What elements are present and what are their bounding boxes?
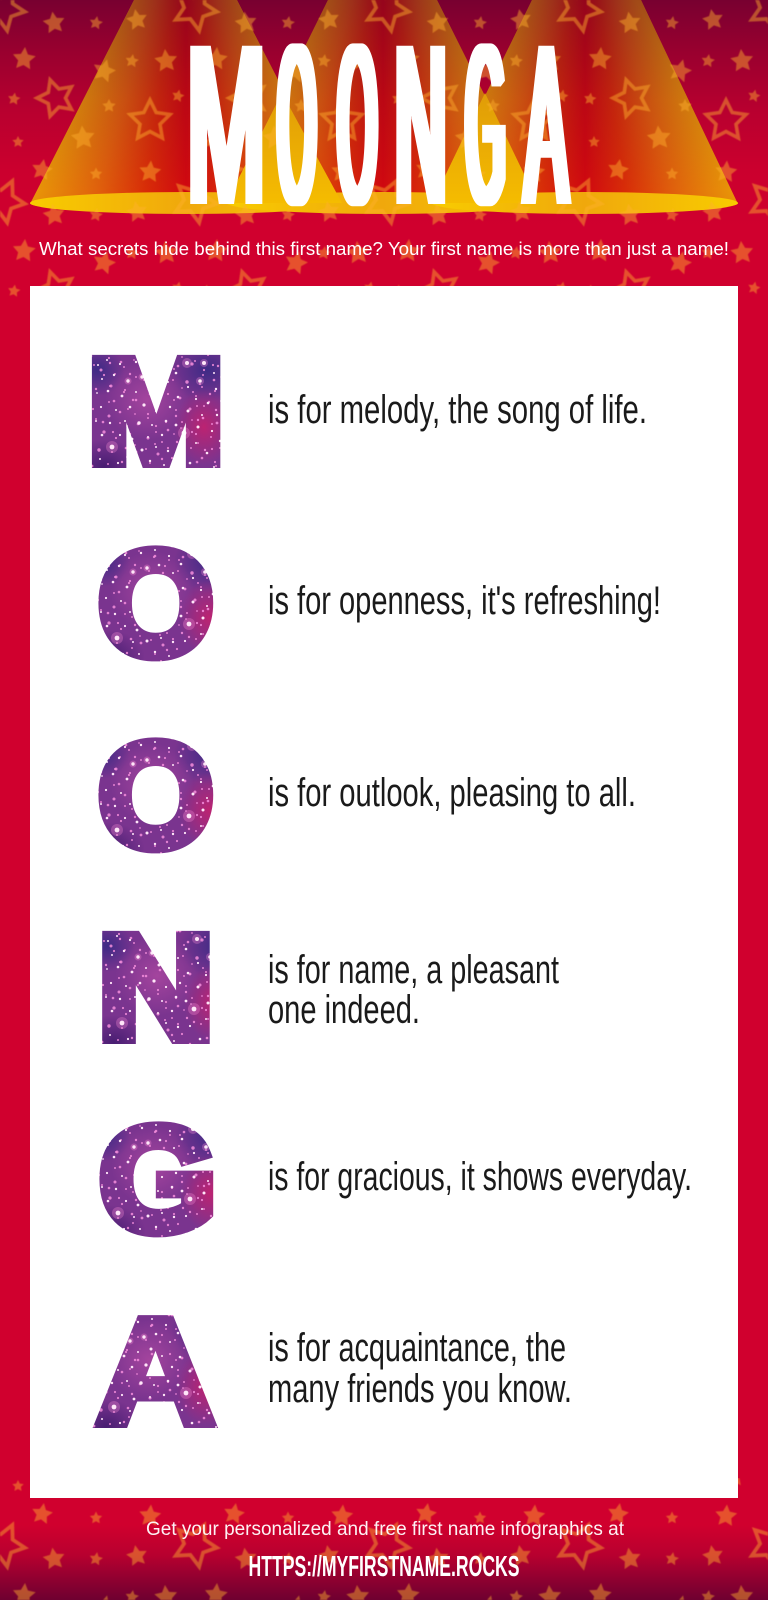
letter O: O xyxy=(98,522,213,686)
letter O: O xyxy=(98,714,213,878)
row: A xyxy=(96,1286,572,1456)
title: N xyxy=(395,0,446,253)
title: M xyxy=(187,0,266,253)
title: O xyxy=(278,0,315,253)
text: name: one indeed. xyxy=(268,988,420,1032)
letter M: M xyxy=(88,330,225,494)
text: name xyxy=(268,948,559,1032)
text: acquaintance xyxy=(268,1326,572,1411)
text: name: is for name, a pleasant xyxy=(268,948,559,992)
title xyxy=(187,0,572,253)
title: A xyxy=(525,0,567,253)
text: acquaintance: is for acquaintance, the xyxy=(268,1326,566,1370)
row: O second xyxy=(98,714,636,878)
footer text: HTTPS://MYFIRSTNAME.ROCKS xyxy=(248,1551,520,1583)
text: acquaintance: many friends you know. xyxy=(268,1367,572,1411)
letter A: A xyxy=(96,1286,215,1456)
subtitle: What secrets hide behind this first name? Your first name is more than just a name! xyxy=(39,238,729,259)
panel: letters and meanings xyxy=(30,286,738,1498)
letter N: N xyxy=(98,906,214,1070)
letter G: G xyxy=(99,1098,216,1262)
title: G xyxy=(466,0,505,253)
footer text: Get your personalized and free first name infographics at xyxy=(146,1519,625,1540)
row: M xyxy=(88,330,647,494)
spotlight cone: right xyxy=(486,0,738,204)
row: O xyxy=(98,522,661,686)
row: G xyxy=(99,1098,692,1262)
title: O xyxy=(338,0,376,253)
spotlight cone: left xyxy=(30,0,278,204)
spotlight cone: middle xyxy=(290,0,484,192)
row: N xyxy=(98,906,559,1070)
footer text xyxy=(146,1519,625,1583)
